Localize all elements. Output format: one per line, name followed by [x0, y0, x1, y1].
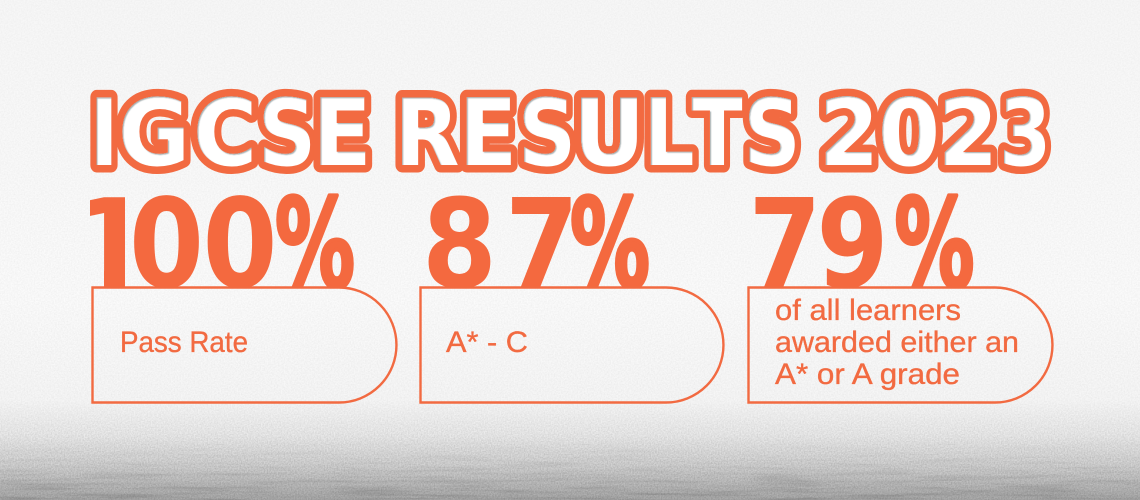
label: Pass Rate [120, 326, 248, 359]
statistic: 100%: 0 [202, 174, 278, 317]
title: 3 [999, 79, 1051, 187]
panel: A* to C [420, 174, 723, 402]
statistic: 79% [756, 193, 974, 286]
statistic: 79%: % [894, 174, 974, 317]
title: S [744, 79, 800, 187]
statistic: 100% [90, 193, 354, 287]
title: T [692, 79, 742, 187]
label: of all learners [775, 294, 961, 327]
title: 0 [878, 79, 940, 187]
title: U [573, 79, 645, 187]
rounded box [748, 288, 1052, 402]
label: awarded either an [775, 326, 1019, 359]
statistic: 87%: % [570, 174, 650, 317]
statistic: 87%: 8 [422, 174, 497, 317]
title: E [459, 79, 517, 187]
title: R [394, 79, 460, 187]
title: S [518, 79, 576, 187]
statistic: 100%: 1 [69, 174, 155, 317]
title: 2 [938, 79, 998, 187]
panel: pass rate [90, 193, 398, 404]
title [90, 79, 1051, 187]
statistic: 79%: 9 [816, 174, 888, 317]
title: I [90, 79, 118, 187]
label: A* - C [446, 326, 528, 359]
statistic: 79%: 7 [748, 174, 822, 317]
label: A* or A grade [775, 358, 960, 391]
rounded box [92, 288, 396, 402]
statistic: 87% [428, 193, 649, 286]
title: S [258, 79, 316, 187]
label [775, 294, 1019, 391]
title: L [644, 79, 694, 187]
panel: A* or A grade [748, 174, 1052, 402]
rounded box [420, 288, 723, 402]
title: G [118, 79, 190, 187]
title: 2 [819, 79, 879, 187]
statistic: 87%: 7 [505, 174, 579, 317]
statistic: 100%: % [275, 174, 355, 317]
statistic: 100%: 0 [129, 174, 204, 317]
title: C [193, 79, 257, 187]
title: E [312, 79, 372, 187]
